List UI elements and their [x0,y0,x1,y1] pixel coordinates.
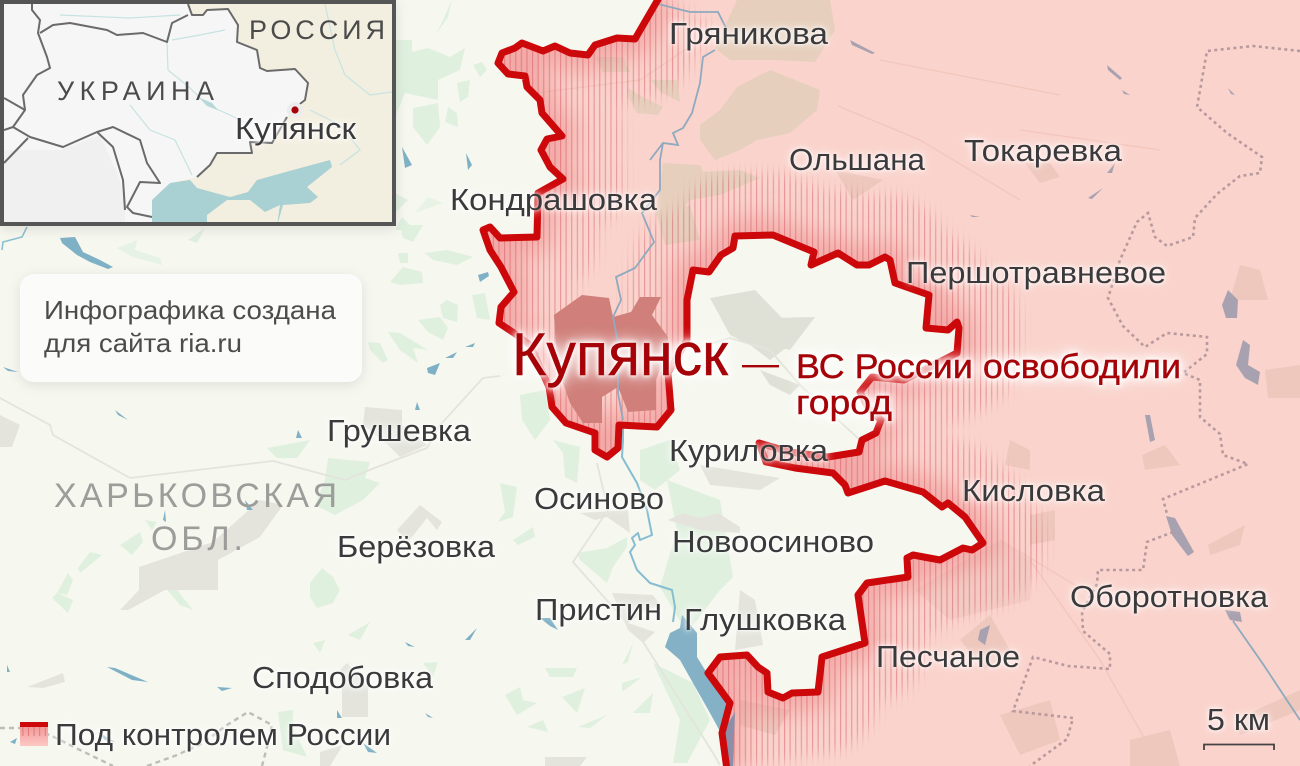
scale line [1204,744,1274,750]
hatch glow [483,0,983,766]
legend text: Под контролем России [55,717,391,752]
scale bar [1204,702,1274,750]
legend [20,717,391,752]
label: Кондрашовка: Кондрашовка [450,182,658,217]
forest patches [52,0,733,763]
inset: borders [4,4,308,217]
inset label: Украина: УКРАИНА [57,76,214,106]
dashed oblast border left [0,712,272,766]
label: Новоосиново: Новоосиново [672,524,874,559]
small lakes left [3,147,558,753]
frontline [483,0,983,766]
callout leader [742,365,779,367]
info text line 2: для сайта ria.ru [44,328,242,358]
city of Kupyansk [554,295,668,423]
town labels [252,16,1269,695]
legend swatch [20,722,48,746]
callout: Kupyansk [512,321,1181,422]
info text line 1: Инфографика создана [44,295,337,325]
inset: Kupyansk marker [287,102,303,118]
label: Kharkiv oblast line 2: ОБЛ. [151,520,243,558]
info box [20,274,362,382]
label: Грушевка: Грушевка [327,413,472,448]
label: Сподобовка: Сподобовка [252,660,434,695]
faint roads in pink [520,40,1160,766]
inset label: Россия: РОССИЯ [249,15,385,45]
label: Першотравневое: Першотравневое [906,255,1166,290]
inset: rivers [60,4,392,175]
label: Kharkiv oblast line 1: ХАРЬКОВСКАЯ [54,477,337,515]
reservoir [665,615,730,735]
lakes in pink [722,40,1260,766]
river in pink [613,2,1300,720]
region label [54,477,337,558]
inset map [0,0,396,226]
inset: Ukraine and neighbours [0,0,308,226]
dotted oblast border right [1013,46,1300,766]
hatch stripes [488,0,1048,766]
label: Пристин: Пристин [535,592,662,627]
label: Токаревка: Токаревка [964,133,1123,168]
small river west [2,227,27,250]
callout text line 1: ВС России освободили [796,348,1181,386]
label: Гряникова: Гряникова [669,16,829,51]
inset: Crimea [207,200,280,222]
gray settlements [0,407,780,766]
label: Куриловка: Куриловка [669,433,829,468]
label: Песчаное: Песчаное [876,639,1020,674]
callout text line 2: город [796,384,892,422]
inset frame [2,2,394,224]
roads [0,338,900,765]
river: Oskol [622,425,675,622]
label: Ольшана: Ольшана [789,142,926,177]
inset background: Russia [0,0,396,226]
label: Берёзовка: Берёзовка [337,529,496,564]
scale label: 5 км [1207,702,1270,737]
inset: sea [152,160,332,226]
inset: hillshade [4,135,125,222]
inset label: Купянск: Купянск [235,111,356,146]
label: Глушковка: Глушковка [684,602,847,637]
tan forests [595,0,835,245]
label: Кисловка: Кисловка [962,473,1106,508]
Russian controlled area [488,0,1300,766]
label: Осиново: Осиново [534,481,664,516]
villages on pink [740,163,1300,766]
label: Оборотновка: Оборотновка [1070,579,1269,614]
callout city name: Купянск [512,321,729,388]
